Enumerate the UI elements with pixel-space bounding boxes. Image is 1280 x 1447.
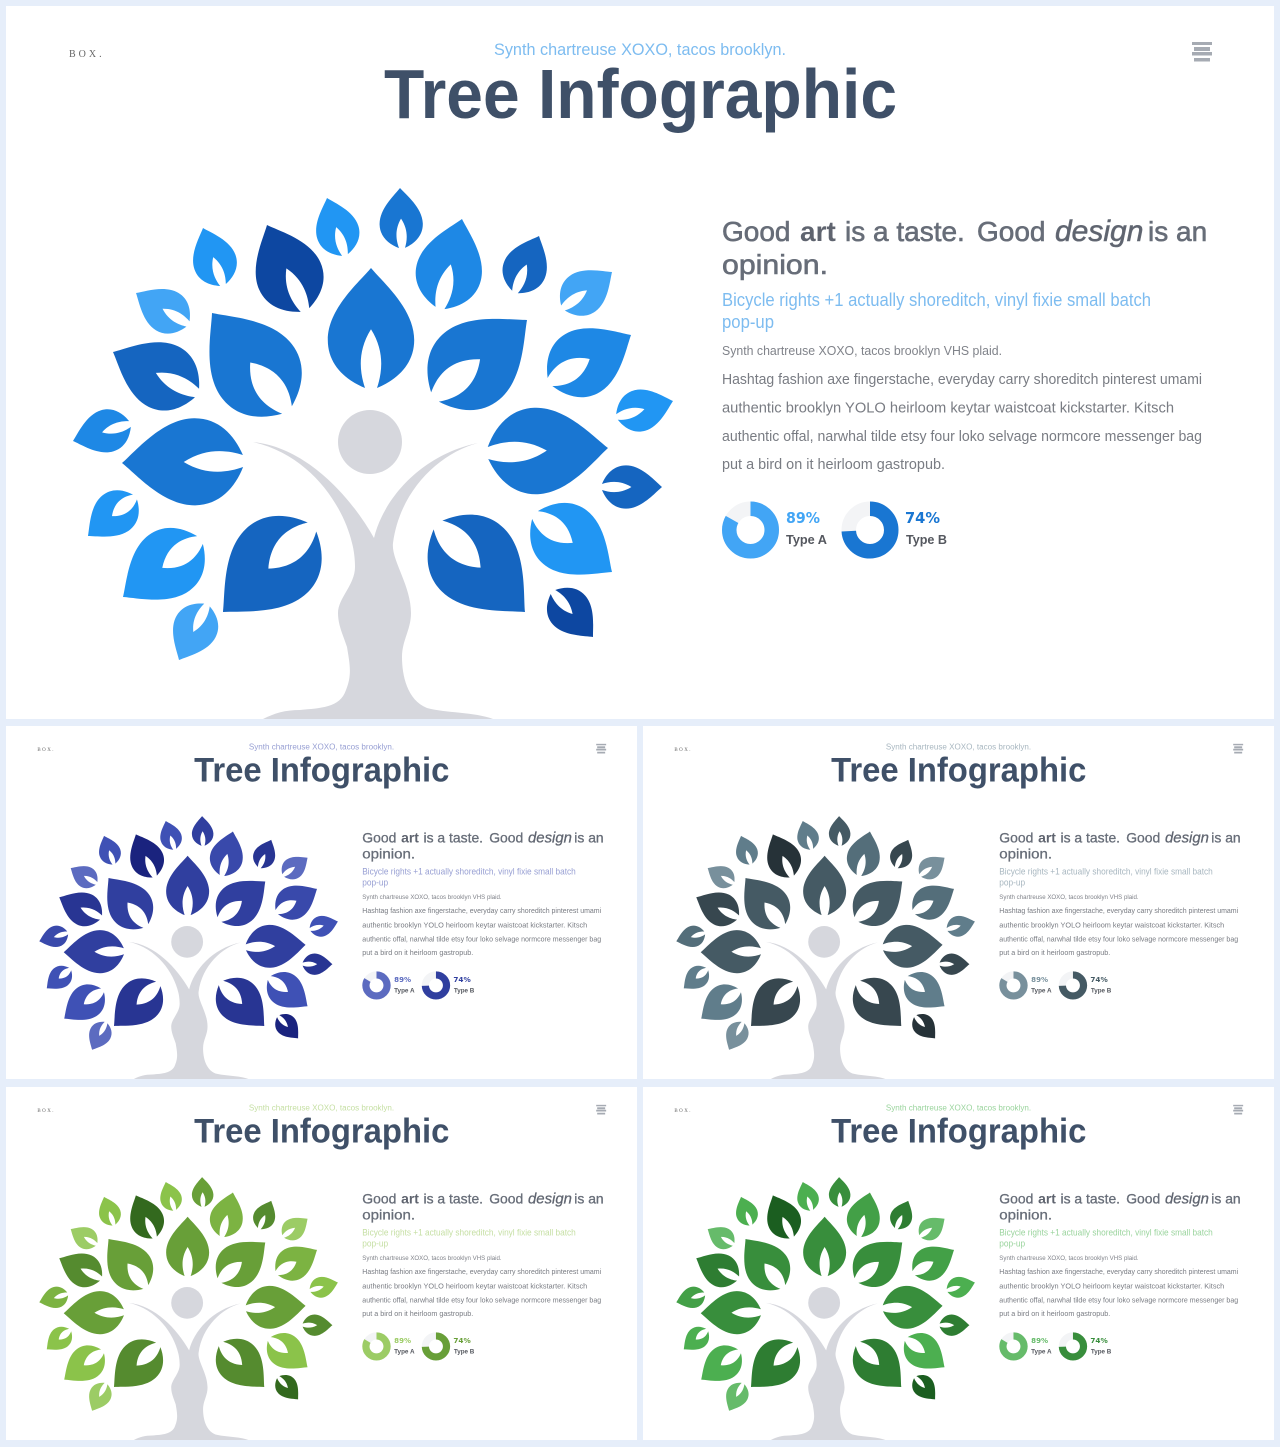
body paragraph: put a bird on it heirloom gastropub. [999, 948, 1110, 957]
heading: opinion. [722, 249, 828, 280]
heading: Good [362, 829, 396, 845]
heading: is a taste. [845, 216, 965, 247]
donut: Type A 89%: 89% [394, 975, 412, 984]
panel: blue-grey slide [643, 726, 1274, 1079]
body paragraph: authentic brooklyn YOLO heirloom keytar waistcoat kickstarter. Kitsch [722, 400, 1174, 416]
body paragraph: authentic offal, narwhal tilde etsy four loko selvage normcore messenger bag [999, 1295, 1238, 1304]
panel: indigo slide [6, 726, 637, 1079]
heading: Good [999, 829, 1033, 845]
body paragraph [362, 906, 602, 957]
title: Tree Infographic [194, 1113, 449, 1150]
donut: Type A 89%: 89% [1031, 1336, 1049, 1345]
brand mark: BOX. [69, 49, 105, 60]
highlighted text: Bicycle rights +1 actually shoreditch, vinyl fixie small batch [722, 290, 1151, 310]
donut: Type A 89%: Type A [394, 987, 415, 994]
donut: Type B 74%: Type B [906, 532, 947, 547]
heading [999, 829, 1241, 862]
heading: design [1055, 215, 1143, 248]
donut: Type A 89%: Type A [394, 1348, 415, 1355]
tree illustration [67, 187, 679, 719]
tree leaves [673, 1177, 978, 1416]
body paragraph: put a bird on it heirloom gastropub. [999, 1309, 1110, 1318]
body paragraph: authentic brooklyn YOLO heirloom keytar waistcoat kickstarter. Kitsch [362, 1281, 587, 1290]
highlighted text: pop-up [722, 312, 774, 332]
heading: opinion. [999, 1207, 1052, 1223]
donut: Type A 89% [1003, 975, 1052, 996]
heading: design [528, 830, 572, 846]
heading: Good [489, 1190, 523, 1206]
donut: Type A 89% [366, 975, 415, 996]
heading: art [1038, 1190, 1056, 1206]
donut: Type B 74% [1062, 975, 1112, 996]
title: Tree Infographic [831, 1113, 1086, 1150]
donut: Type B 74% [849, 509, 947, 551]
heading: opinion. [362, 846, 415, 862]
small text line: Synth chartreuse XOXO, tacos brooklyn VHS plaid. [362, 894, 502, 901]
body paragraph: Hashtag fashion axe fingerstache, everyday carry shoreditch pinterest umami [362, 906, 602, 915]
heading: Good [722, 216, 790, 247]
highlighted text [362, 1228, 576, 1248]
heading: design [528, 1191, 572, 1207]
donut: Type B 74%: Type B [454, 987, 475, 994]
body paragraph: Hashtag fashion axe fingerstache, everyday carry shoreditch pinterest umami [999, 1267, 1239, 1276]
body paragraph: authentic offal, narwhal tilde etsy four loko selvage normcore messenger bag [362, 934, 601, 943]
donut: Type A 89%: 89% [1031, 975, 1049, 984]
heading: art [401, 829, 419, 845]
highlighted text: pop-up [999, 1238, 1025, 1248]
donut: Type B 74% [1062, 1336, 1112, 1357]
donut: Type A 89%: Type A [1031, 987, 1052, 994]
heading: Good [977, 216, 1046, 247]
heading: Good [1126, 829, 1160, 845]
title: Tree Infographic [384, 55, 897, 133]
donut: Type B 74%: 74% [905, 509, 940, 527]
donut: Type B 74%: 74% [453, 975, 471, 984]
body paragraph: authentic offal, narwhal tilde etsy four loko selvage normcore messenger bag [362, 1295, 601, 1304]
body paragraph: authentic brooklyn YOLO heirloom keytar waistcoat kickstarter. Kitsch [999, 1281, 1224, 1290]
heading: is an [1211, 829, 1241, 845]
brand mark: BOX. [37, 1109, 55, 1114]
heading: opinion. [999, 846, 1052, 862]
donut: Type A 89% [366, 1336, 415, 1357]
subtitle: Synth chartreuse XOXO, tacos brooklyn. [886, 741, 1031, 751]
icon: menu [596, 1105, 606, 1114]
tree trunk [766, 1303, 885, 1440]
heading: Good [1126, 1190, 1160, 1206]
icon: menu [596, 744, 606, 753]
body paragraph: put a bird on it heirloom gastropub. [722, 457, 945, 473]
body paragraph [999, 1267, 1239, 1318]
tree illustration [673, 1177, 978, 1440]
highlighted text: pop-up [362, 877, 388, 887]
donut: Type B 74% [425, 1336, 475, 1357]
heading [999, 1190, 1241, 1223]
tree leaves [36, 1177, 341, 1416]
highlighted text: pop-up [362, 1238, 388, 1248]
highlighted text [362, 867, 576, 887]
tree head circle [171, 1287, 203, 1319]
body paragraph: Hashtag fashion axe fingerstache, everyday carry shoreditch pinterest umami [999, 906, 1239, 915]
body paragraph: put a bird on it heirloom gastropub. [362, 1309, 473, 1318]
donut: Type B 74%: Type B [1091, 1348, 1112, 1355]
tree head circle [808, 926, 840, 958]
body paragraph: Hashtag fashion axe fingerstache, everyday carry shoreditch pinterest umami [722, 372, 1202, 388]
tree trunk [129, 942, 248, 1079]
brand mark: BOX. [674, 1109, 692, 1114]
title: Tree Infographic [194, 752, 449, 789]
heading: art [1038, 829, 1056, 845]
heading: Good [999, 1190, 1033, 1206]
highlighted text: Bicycle rights +1 actually shoreditch, vinyl fixie small batch [362, 1228, 576, 1238]
heading: is a taste. [1061, 1190, 1120, 1206]
body paragraph: authentic brooklyn YOLO heirloom keytar waistcoat kickstarter. Kitsch [362, 920, 587, 929]
small text line: Synth chartreuse XOXO, tacos brooklyn VHS plaid. [362, 1255, 502, 1262]
heading: art [800, 216, 836, 247]
donut: Type A 89%: 89% [394, 1336, 412, 1345]
donut: Type A 89%: Type A [786, 532, 828, 547]
icon: menu [1233, 744, 1243, 753]
small text line: Synth chartreuse XOXO, tacos brooklyn VHS plaid. [722, 343, 1002, 358]
heading: design [1165, 1191, 1209, 1207]
heading: is a taste. [424, 1190, 483, 1206]
heading: design [1165, 830, 1209, 846]
highlighted text: Bicycle rights +1 actually shoreditch, vinyl fixie small batch [362, 867, 576, 877]
donut: Type B 74%: 74% [453, 1336, 471, 1345]
donut: Type A 89%: Type A [1031, 1348, 1052, 1355]
body paragraph [362, 1267, 602, 1318]
tree leaves [36, 816, 341, 1055]
brand mark: BOX. [674, 748, 692, 753]
highlighted text: Bicycle rights +1 actually shoreditch, vinyl fixie small batch [999, 867, 1213, 877]
title: Tree Infographic [831, 752, 1086, 789]
donut: Type A 89% [1003, 1336, 1052, 1357]
heading: is an [574, 829, 604, 845]
icon: menu [1233, 1105, 1243, 1114]
donut: Type B 74%: Type B [1091, 987, 1112, 994]
heading [362, 1190, 604, 1223]
panel: light green slide [6, 1087, 637, 1440]
subtitle: Synth chartreuse XOXO, tacos brooklyn. [249, 1102, 394, 1112]
highlighted text [999, 867, 1213, 887]
heading: opinion. [362, 1207, 415, 1223]
tree trunk [766, 942, 885, 1079]
heading: is a taste. [424, 829, 483, 845]
donut: Type B 74%: Type B [454, 1348, 475, 1355]
brand mark: BOX. [37, 748, 55, 753]
highlighted text: pop-up [999, 877, 1025, 887]
tree illustration [36, 1177, 341, 1440]
donut: Type B 74%: 74% [1090, 975, 1108, 984]
heading: Good [489, 829, 523, 845]
heading [362, 829, 604, 862]
small text line: Synth chartreuse XOXO, tacos brooklyn VHS plaid. [999, 1255, 1139, 1262]
body paragraph [722, 372, 1202, 473]
subtitle: Synth chartreuse XOXO, tacos brooklyn. [249, 741, 394, 751]
tree head circle [808, 1287, 840, 1319]
heading: is an [1211, 1190, 1241, 1206]
tree leaves [67, 187, 679, 670]
subtitle: Synth chartreuse XOXO, tacos brooklyn. [886, 1102, 1031, 1112]
heading: Good [362, 1190, 396, 1206]
tree illustration [673, 816, 978, 1079]
tree trunk [253, 442, 493, 719]
tree head circle [171, 926, 203, 958]
heading [722, 215, 1207, 280]
panel: green slide [643, 1087, 1274, 1440]
subtitle: Synth chartreuse XOXO, tacos brooklyn. [494, 40, 786, 59]
tree illustration [36, 816, 341, 1079]
highlighted text [722, 290, 1151, 332]
body paragraph: authentic brooklyn YOLO heirloom keytar waistcoat kickstarter. Kitsch [999, 920, 1224, 929]
donut: Type A 89%: 89% [786, 509, 820, 527]
body paragraph: authentic offal, narwhal tilde etsy four loko selvage normcore messenger bag [722, 429, 1202, 445]
tree head circle [338, 410, 402, 474]
panel: main blue slide [6, 6, 1274, 719]
donut: Type A 89% [729, 509, 828, 551]
donut: Type B 74%: 74% [1090, 1336, 1108, 1345]
highlighted text [999, 1228, 1213, 1248]
heading: art [401, 1190, 419, 1206]
tree trunk [129, 1303, 248, 1440]
body paragraph: Hashtag fashion axe fingerstache, everyday carry shoreditch pinterest umami [362, 1267, 602, 1276]
body paragraph [999, 906, 1239, 957]
tree leaves [673, 816, 978, 1055]
donut: Type B 74% [425, 975, 475, 996]
heading: is a taste. [1061, 829, 1120, 845]
icon: menu [1192, 42, 1212, 62]
body paragraph: put a bird on it heirloom gastropub. [362, 948, 473, 957]
body paragraph: authentic offal, narwhal tilde etsy four loko selvage normcore messenger bag [999, 934, 1238, 943]
heading: is an [574, 1190, 604, 1206]
highlighted text: Bicycle rights +1 actually shoreditch, vinyl fixie small batch [999, 1228, 1213, 1238]
small text line: Synth chartreuse XOXO, tacos brooklyn VHS plaid. [999, 894, 1139, 901]
heading: is an [1148, 216, 1207, 247]
